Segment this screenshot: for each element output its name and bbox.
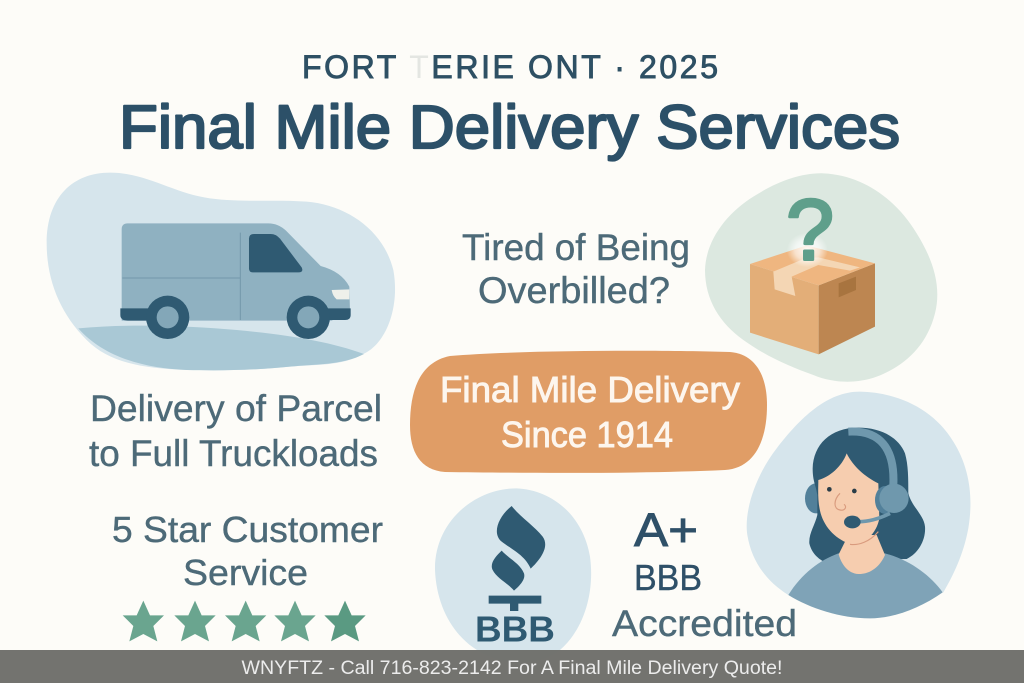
hair: [809, 428, 925, 561]
rear wheel: [146, 296, 189, 339]
text: A+ BBB accredited: Accredited: [612, 603, 797, 644]
text: A+ BBB accredited: BBB: [634, 557, 702, 598]
box left face: [750, 264, 819, 354]
box right face: [819, 263, 875, 354]
headset band: [848, 432, 893, 485]
panel: van illustration: [47, 173, 395, 370]
agent background blob: [747, 392, 970, 595]
panel: customer service agent: [747, 392, 970, 618]
callout: final mile delivery since 1914: [410, 351, 767, 473]
title: Final Mile Delivery Services: [119, 93, 900, 161]
torch base: [489, 596, 541, 611]
box background blob: [705, 173, 937, 382]
packing tape: [773, 257, 860, 296]
BBB wordmark: BBB: [475, 609, 555, 650]
nose and jaw lines: [835, 493, 878, 545]
text: delivery of parcel to full truckloads: to Full Truckloads: [89, 433, 378, 474]
text: A+ BBB accredited: A+: [634, 503, 698, 556]
panel: BBB logo: [435, 488, 591, 662]
box label: [839, 277, 856, 297]
text: delivery of parcel to full truckloads: [89, 388, 382, 474]
question mark: ?: [786, 182, 834, 278]
van body: [122, 223, 350, 321]
left ear cup: [805, 483, 827, 513]
eyebrow: location and year: FORT TERIE ONT · 2025: [302, 49, 718, 85]
van panel lines: [122, 233, 240, 320]
torch lower flame: [492, 551, 524, 591]
right ear cup: [875, 484, 909, 514]
callout: final mile delivery since 1914: Final Mile Delivery: [440, 369, 740, 410]
bumpers: [120, 308, 351, 321]
footer bar: [0, 650, 1024, 683]
callout: final mile delivery since 1914: Since 1914: [501, 414, 673, 455]
text: 5 star customer service: Service: [183, 552, 308, 593]
panel: box with question mark: [705, 173, 937, 382]
box top: [750, 245, 875, 285]
microphone: [844, 513, 890, 528]
headlight: [332, 289, 349, 299]
shirt: [788, 553, 943, 618]
torch upper flame: [497, 506, 545, 569]
neck: [839, 535, 885, 574]
text: tired of being overbilled: [462, 227, 690, 311]
eyes: [827, 487, 857, 493]
van background blob: [47, 173, 395, 370]
footer bar: WNYFTZ - Call 716-823-2142 For A Final Mile Delivery Quote!: [242, 658, 782, 679]
text: tired of being overbilled: Overbilled?: [478, 270, 670, 311]
van window: [249, 234, 302, 272]
glow: [787, 233, 828, 267]
text: delivery of parcel to full truckloads: Delivery of Parcel: [90, 388, 382, 429]
ground: [78, 326, 364, 370]
BBB background blob: [435, 488, 591, 662]
text: tired of being overbilled: Tired of Being: [462, 227, 690, 268]
face: [818, 453, 879, 544]
front wheel: [287, 296, 330, 339]
star rating: [123, 601, 366, 641]
text: A+ BBB accredited: [612, 503, 797, 644]
text: 5 star customer service: [112, 509, 383, 593]
text: 5 star customer service: 5 Star Customer: [112, 509, 383, 550]
